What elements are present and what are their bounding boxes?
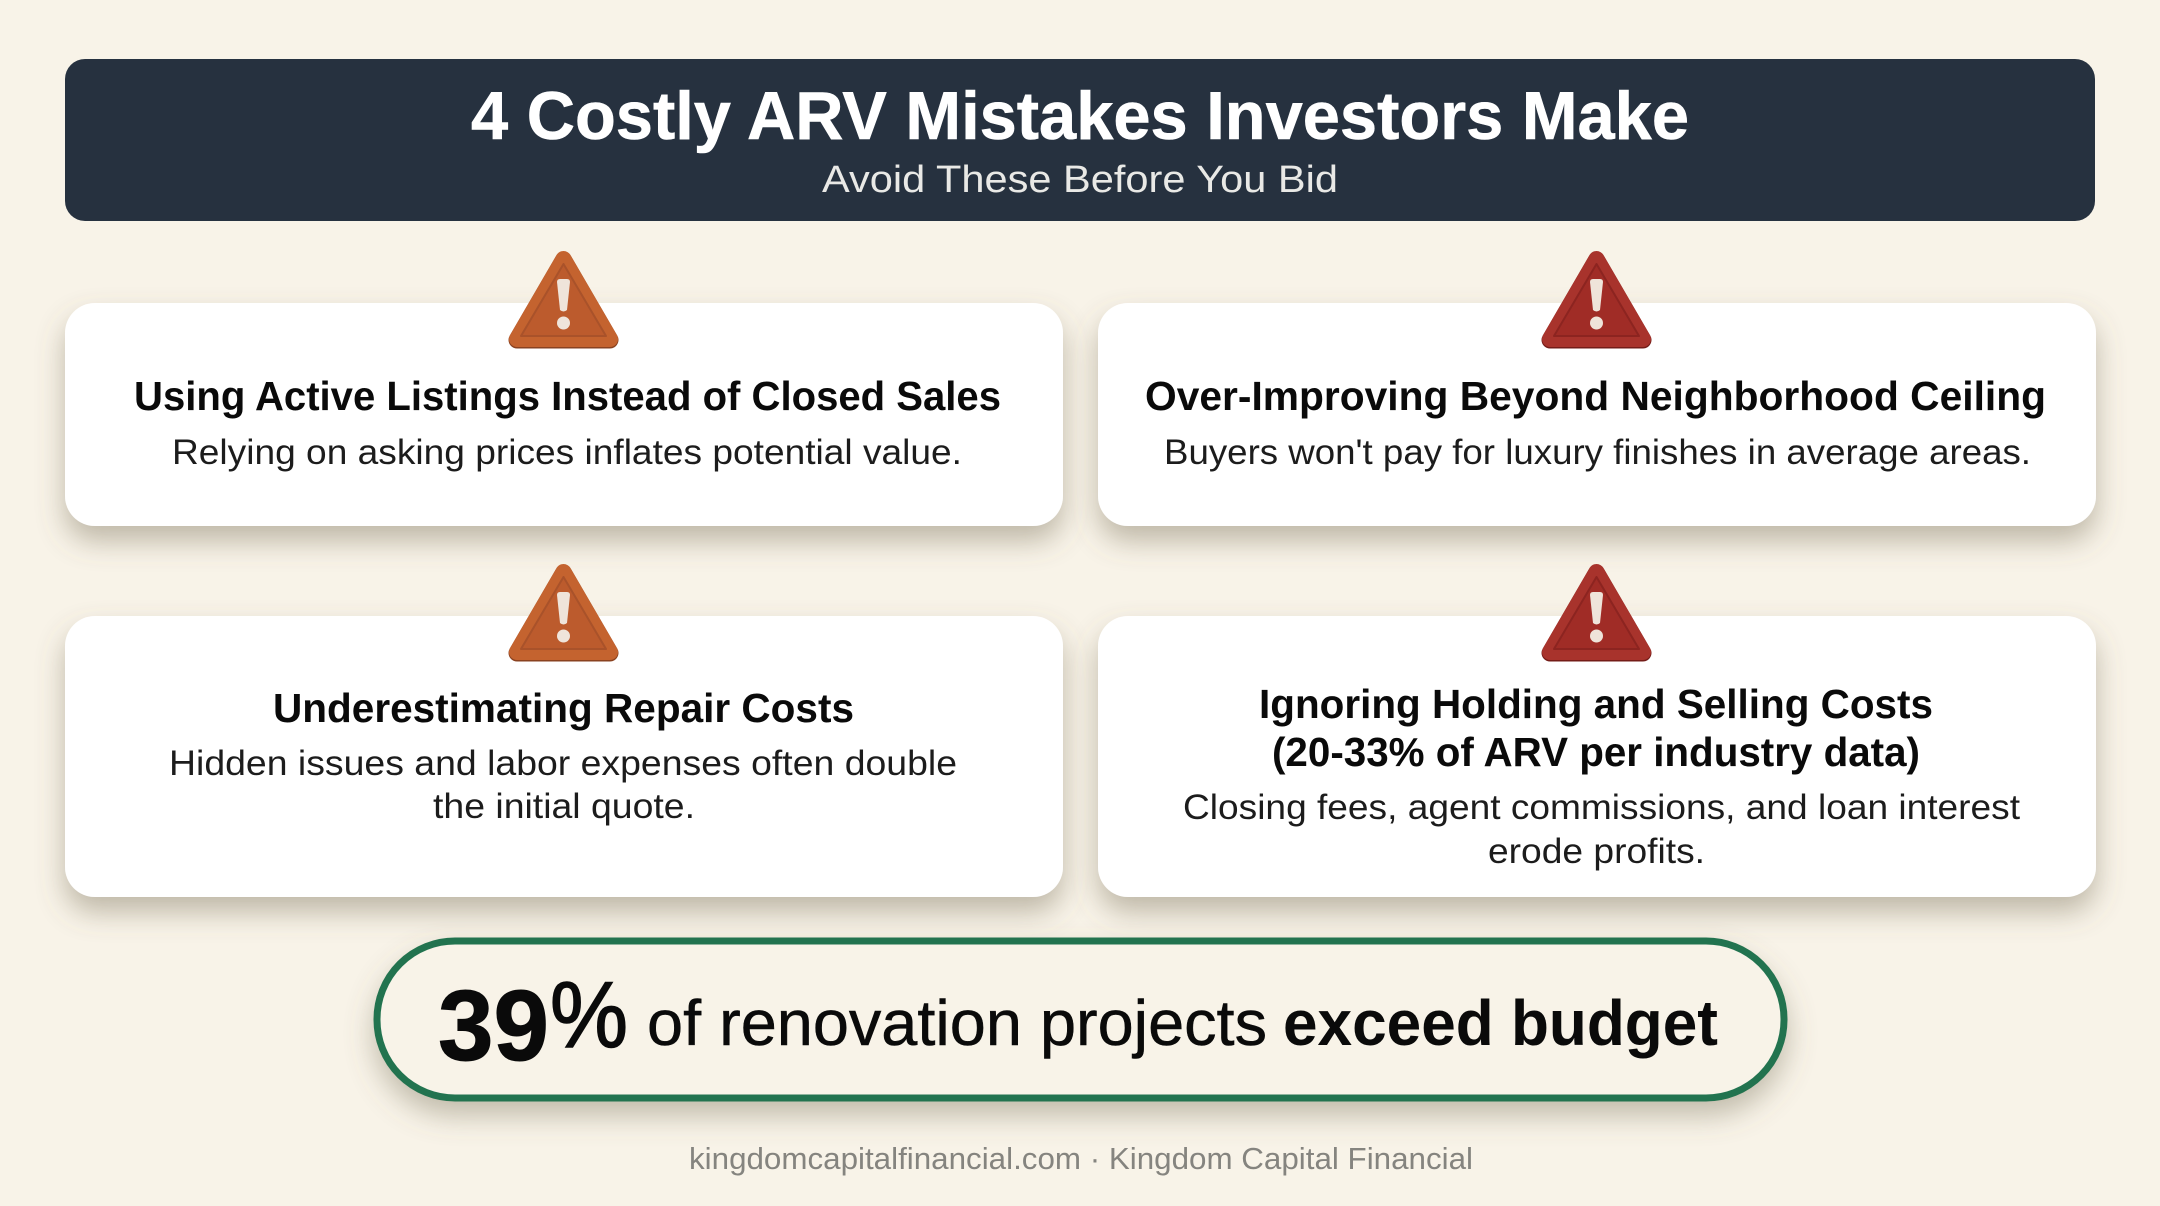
heading: holding and selling costs: Ignoring Holding and Selling Costs	[1259, 681, 1933, 727]
panel: active listings mistake	[65, 303, 1063, 526]
subtitle: Avoid These Before You Bid	[822, 159, 1338, 201]
statistic: 39%: 39	[438, 970, 549, 1082]
body: over-improving: Buyers won't pay for luxury finishes in average areas.	[1164, 433, 2031, 472]
heading: over-improving: Over-Improving Beyond Neighborhood Ceiling	[1145, 373, 2046, 419]
body: active listings: Relying on asking prices inflates potential value.	[172, 433, 962, 472]
heading: holding and selling costs: (20-33% of ARV per industry data)	[1272, 729, 1920, 775]
heading: active listings: Using Active Listings Instead of Closed Sales	[134, 373, 1001, 419]
header banner	[65, 59, 2095, 221]
callout text: of renovation projects	[647, 987, 1267, 1059]
title: 4 Costly ARV Mistakes Investors Make	[471, 78, 1689, 154]
body: repair costs: the initial quote.	[433, 787, 695, 826]
statistic: 39%	[438, 962, 628, 1082]
icon: orange warning triangle, top left	[517, 259, 610, 340]
heading: holding and selling costs	[1259, 681, 1933, 775]
icon: red warning triangle, top right	[1550, 259, 1643, 340]
footer credit: kingdomcapitalfinancial.com · Kingdom Capital Financial	[689, 1141, 1473, 1176]
heading: repair costs: Underestimating Repair Costs	[273, 685, 854, 731]
panel: holding and selling costs mistake	[1098, 616, 2096, 897]
statistic: 39%: %	[550, 962, 628, 1067]
callout text	[647, 987, 1718, 1059]
body: holding and selling costs: Closing fees, agent commissions, and loan interest	[1183, 788, 2020, 827]
icon: orange warning triangle, bottom left	[517, 572, 610, 653]
body: repair costs: Hidden issues and labor expenses often double	[169, 744, 957, 783]
panel: repair costs mistake	[65, 616, 1063, 897]
callout: renovation budget statistic	[377, 941, 1784, 1098]
body: holding and selling costs: erode profits.	[1488, 832, 1705, 871]
body: holding and selling costs	[1183, 788, 2020, 871]
callout text: exceed budget	[1283, 987, 1718, 1059]
panel: over-improving mistake	[1098, 303, 2096, 526]
icon: red warning triangle, bottom right	[1550, 572, 1643, 653]
body: repair costs	[169, 744, 957, 826]
